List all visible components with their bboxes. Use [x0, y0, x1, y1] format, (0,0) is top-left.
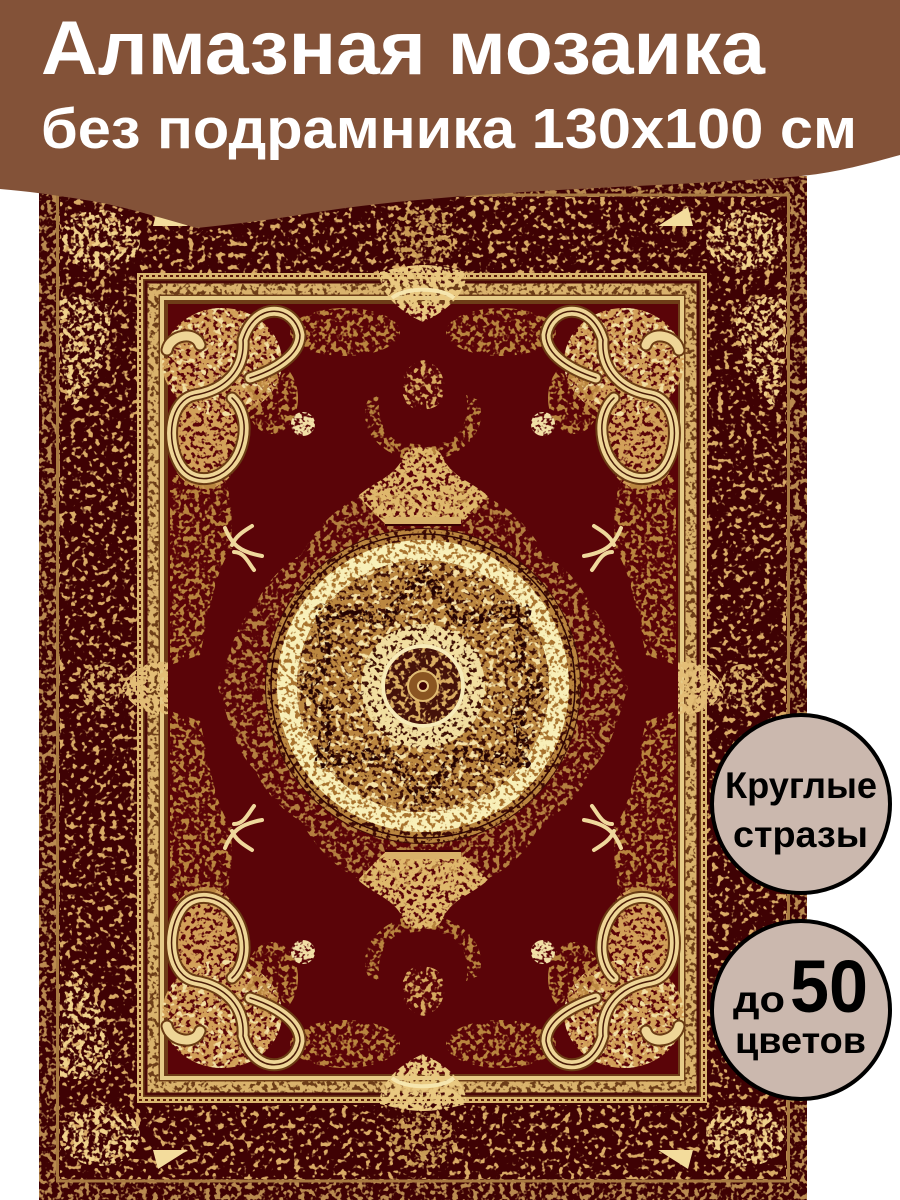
medallion crown: bottom [358, 850, 488, 1016]
cartouche: top [380, 208, 466, 322]
border floral band [60, 197, 786, 1179]
medallion floral halo [218, 488, 628, 888]
inner toothed ring [371, 634, 475, 738]
badge: round rhinestones: стразы [733, 814, 868, 855]
medallion crown: top [358, 360, 488, 526]
cartouche: right [678, 662, 766, 714]
subtitle: без подрамника 130х100 см [41, 97, 857, 161]
title: Алмазная мозаика [41, 6, 766, 91]
central field [168, 304, 678, 1074]
dark star [306, 572, 540, 800]
cartouche: bottom [380, 1054, 466, 1168]
badge: up to 50 colors [712, 921, 890, 1099]
corner ornament: top left [60, 207, 400, 665]
badge: round rhinestones [712, 715, 890, 893]
badge: round rhinestones: Круглые [725, 765, 877, 806]
corner ornament: bottom left [60, 711, 400, 1169]
corner ornament: top right [446, 207, 786, 665]
frame band [137, 273, 707, 1103]
header banner [0, 0, 900, 228]
badge: up to 50 colors: 50 [790, 945, 868, 1028]
corner ornament: bottom right [446, 711, 786, 1169]
cream ring [287, 550, 559, 822]
cartouche: left [80, 662, 168, 714]
carpet image [39, 176, 807, 1200]
central medallion [265, 528, 581, 844]
border inner line [58, 195, 788, 1181]
badge: up to 50 colors: цветов [735, 1020, 866, 1061]
carpet outer band [39, 176, 807, 1200]
carpet base [39, 176, 807, 1200]
badge: up to 50 colors: до [733, 979, 785, 1020]
